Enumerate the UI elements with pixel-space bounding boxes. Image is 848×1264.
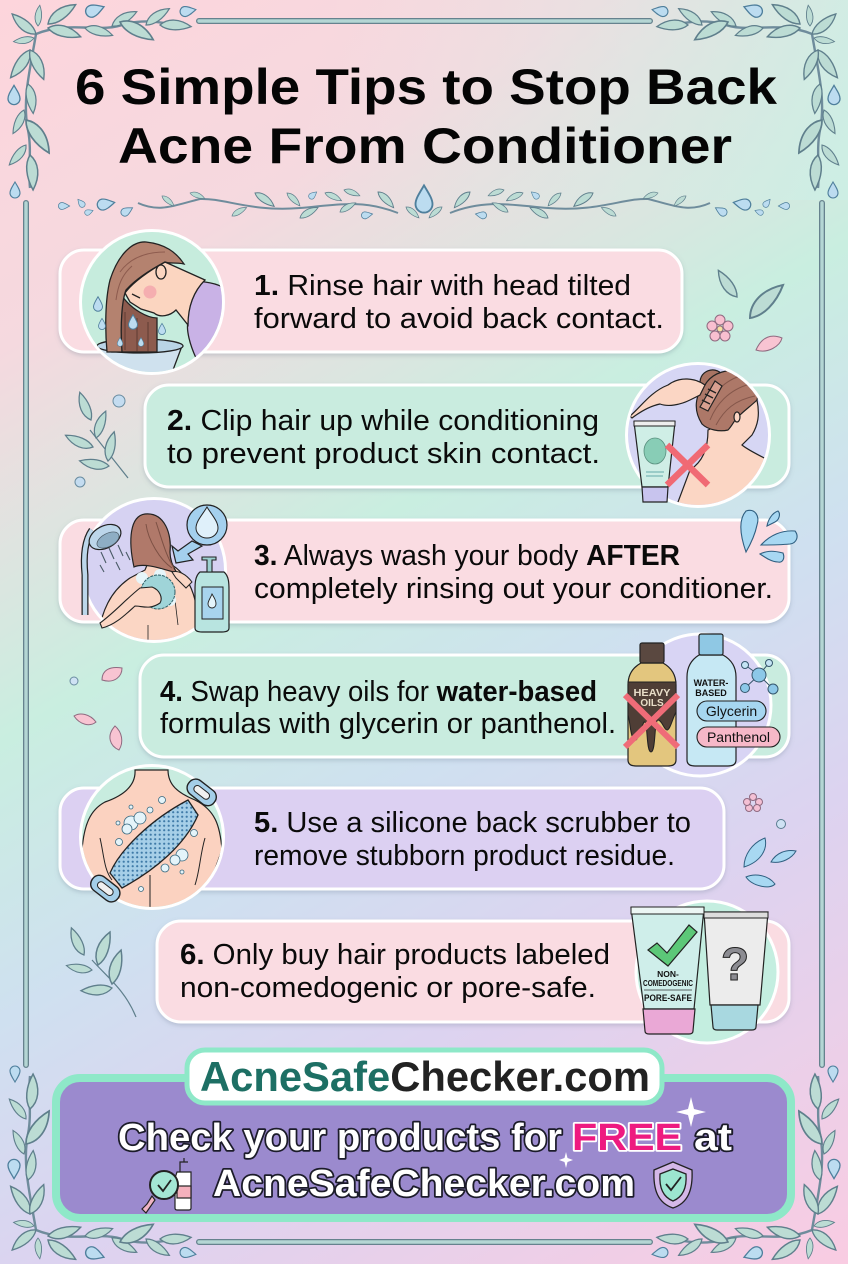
tip 5 text: remove stubborn product residue. [254, 840, 675, 872]
panel: tip 5 [60, 766, 724, 910]
tip 6 text [180, 939, 610, 1004]
icon: heavy oil crossed out vs water-based bottle: OILS [640, 698, 664, 709]
icon: clipped hair with crossed-out tube [626, 364, 775, 510]
website pill: AcneSafeChecker.com [200, 1053, 650, 1100]
icon: shield with check [654, 1162, 692, 1208]
tip 2 text: to prevent product skin contact. [167, 438, 600, 470]
glycerin label [697, 701, 766, 721]
panel: tip 2 [145, 364, 789, 510]
oil bottle [628, 663, 676, 766]
shower head [84, 530, 92, 615]
tip 2 text: 2. Clip hair up while conditioning [167, 405, 599, 437]
tip 1 text: forward to avoid back contact. [254, 303, 664, 335]
icon: heavy oil crossed out vs water-based bottle [625, 634, 780, 776]
panel: tip 3 [60, 498, 789, 645]
icon: showering with scrub and pump bottle [82, 498, 229, 645]
unknown tube [704, 912, 768, 1005]
decoration: petals and dots left of tip 4 [70, 668, 122, 750]
pump bottle [195, 572, 229, 632]
panel: tip 1 [60, 230, 682, 378]
title [75, 59, 777, 174]
decoration: branch left of tip 6 [66, 926, 136, 1017]
water bottle [687, 655, 736, 766]
decoration: flower and drops right of tip 5 [744, 794, 796, 887]
tip 6 text: 6. Only buy hair products labeled [180, 939, 610, 971]
icon: labeled tube vs unknown tube: ? [721, 938, 749, 990]
panel: call to action [56, 1050, 791, 1218]
corner ornament: bottom right [651, 1066, 841, 1264]
icon: labeled tube vs unknown tube [631, 901, 778, 1043]
corner ornament: top right [651, 0, 841, 198]
call to action line 1: at [694, 1117, 732, 1159]
tip 6 text: non-comedogenic or pore-safe. [180, 972, 596, 1004]
call to action line 1: Check your products for [118, 1117, 562, 1159]
decoration: water splashes right of tip 3 [741, 510, 797, 562]
icon: back with silicone scrubber [80, 766, 224, 910]
tip 1 text: 1. Rinse hair with head tilted [254, 270, 631, 302]
icon: center water drop [416, 185, 432, 213]
tip 3 text: completely rinsing out your conditioner. [254, 573, 773, 605]
title: 6 Simple Tips to Stop Back [75, 59, 777, 115]
tip 3 text: 3. Always wash your body AFTER [254, 540, 680, 572]
corner ornament: top left [7, 0, 197, 198]
icon: heavy oil crossed out vs water-based bottle: BASED [695, 688, 727, 698]
vine divider [58, 185, 790, 220]
glycerin label: Glycerin [706, 703, 757, 719]
title: Acne From Conditioner [118, 118, 732, 174]
call to action line 1: FREE [572, 1117, 682, 1159]
speech bubble with water drop [172, 541, 202, 563]
panel: tip 6 [157, 901, 789, 1043]
labeled tube [631, 908, 704, 1009]
tip 1 text [254, 270, 664, 335]
tip 2 text [167, 405, 600, 470]
corner ornament: bottom left [7, 1066, 197, 1264]
tip 3 text [254, 540, 773, 605]
icon: heavy oil crossed out vs water-based bottle: HEAVY [634, 688, 671, 699]
molecule [740, 660, 778, 694]
icon: labeled tube vs unknown tube: PORE-SAFE [644, 993, 692, 1003]
decoration: leaves and flower right of tip 1 [707, 268, 787, 351]
tip 4 text: formulas with glycerin or panthenol. [160, 708, 616, 740]
icon: heavy oil crossed out vs water-based bottle: WATER- [694, 678, 728, 688]
icon: magnifier and product bottle [142, 1158, 191, 1213]
panthenol label: Panthenol [707, 729, 770, 745]
call to action line 1 [118, 1117, 732, 1205]
tip 4 text [160, 676, 616, 740]
panel: tip 4 [140, 634, 789, 776]
call to action line 2: AcneSafeChecker.com [213, 1163, 635, 1205]
tip 5 text: 5. Use a silicone back scrubber to [254, 807, 691, 839]
decoration: branch left of tip 2 [63, 391, 128, 487]
icon: labeled tube vs unknown tube: COMEDOGENIC [643, 979, 693, 988]
panthenol label [697, 727, 780, 747]
tip 5 text [254, 807, 691, 872]
icon: labeled tube vs unknown tube: NON- [657, 969, 679, 979]
icon: rinsing hair forward [80, 230, 224, 378]
tip 4 text: 4. Swap heavy oils for water-based [160, 676, 597, 708]
icon: sparkles [559, 1097, 706, 1168]
